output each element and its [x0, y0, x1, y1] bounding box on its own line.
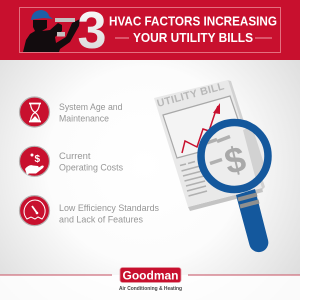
item: system age: [20, 97, 122, 127]
dollar sign: $: [220, 138, 250, 182]
title line 2: YOUR UTILITY BILLS: [133, 31, 253, 45]
label: Current: [59, 151, 91, 161]
logo badge: [120, 268, 181, 282]
handle: [236, 189, 268, 252]
icon: gauge: [20, 196, 50, 226]
background: [0, 60, 300, 300]
item: operating costs: [20, 146, 123, 176]
title line 1: HVAC FACTORS INCREASING: [109, 14, 277, 28]
bill text lines: [180, 162, 207, 196]
footer logo: [0, 268, 300, 292]
illustration: magnifying glass: [201, 122, 268, 252]
label: System Age and: [59, 102, 122, 112]
tagline: Air Conditioning & Heating: [119, 286, 182, 292]
illustration: utility bill: [154, 80, 265, 211]
bill heading: UTILITY BILL: [156, 80, 226, 110]
label: Operating Costs: [59, 163, 123, 173]
item: efficiency: [20, 196, 159, 226]
icon: hand with dollar: $: [34, 154, 40, 165]
bill chart: [163, 96, 245, 158]
header banner: [0, 0, 300, 60]
label: and Lack of Features: [59, 214, 143, 224]
white footer band: [0, 275, 300, 300]
footer logo: Goodman: [122, 270, 178, 282]
big number 3: 3: [78, 2, 106, 60]
label: Low Efficiency Standards: [59, 203, 159, 213]
icon: technician silhouette: [23, 10, 80, 52]
label: Maintenance: [59, 114, 109, 124]
icon: hourglass: [20, 97, 50, 127]
